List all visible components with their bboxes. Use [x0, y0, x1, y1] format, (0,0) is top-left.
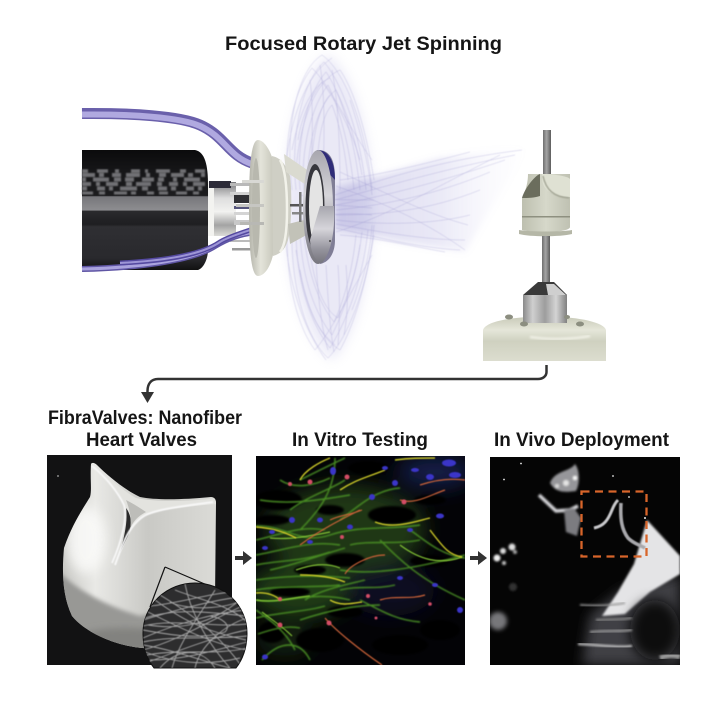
orange and red cells	[300, 479, 465, 665]
carbon-fibre speckle	[82, 171, 205, 193]
heading: FibraValves: Heart Valves	[86, 430, 197, 451]
central metal hub	[208, 181, 258, 250]
blue nuclei	[262, 460, 463, 660]
fiber cone glow	[335, 148, 525, 252]
valve body	[60, 460, 220, 655]
valve lower band	[63, 574, 147, 648]
dark lumens	[257, 491, 445, 650]
lower shaft	[542, 236, 550, 283]
annulus echo	[539, 464, 581, 536]
base	[483, 312, 606, 361]
collar	[523, 282, 567, 325]
arrow	[470, 551, 487, 565]
nanofiber cloud	[285, 55, 525, 360]
fiber disc glow	[285, 55, 372, 360]
upper shaft	[543, 130, 551, 176]
connector arrow	[141, 365, 546, 403]
ultrasound tissue	[582, 575, 680, 665]
fiber inset	[143, 583, 247, 668]
valve back wall	[119, 487, 216, 526]
background tint blobs	[250, 456, 473, 656]
valve highlight	[66, 506, 106, 574]
top tube	[82, 113, 252, 164]
arrow	[235, 551, 252, 565]
panel: in vivo echocardiogram	[489, 457, 680, 665]
magnifier pointer	[150, 567, 207, 607]
bearing ring	[303, 150, 335, 264]
screws	[505, 314, 584, 326]
panel: nanofiber heart valve	[47, 455, 247, 668]
heading: In Vivo Deployment: In Vivo Deployment	[494, 430, 670, 451]
valve leaflets	[594, 500, 645, 548]
heading: FibraValves	[48, 408, 243, 451]
housing and struts	[272, 154, 330, 256]
green fibres	[256, 458, 465, 660]
collector head	[519, 174, 572, 236]
left echoes	[494, 544, 517, 591]
rotary motor assembly	[82, 113, 335, 276]
heading: FibraValves: FibraValves: Nanofiber	[48, 408, 243, 429]
collector assembly	[483, 130, 606, 361]
dashed highlight box	[582, 492, 646, 556]
panel: in vitro microscopy	[250, 456, 473, 665]
calibration dots	[503, 463, 646, 519]
title: Focused Rotary Jet Spinning	[225, 34, 502, 55]
heading: In Vitro Testing: In Vitro Testing	[292, 430, 428, 451]
lower tubes	[82, 228, 256, 269]
slit edges	[92, 466, 213, 565]
motor body	[82, 150, 208, 270]
flange disc	[236, 140, 275, 276]
